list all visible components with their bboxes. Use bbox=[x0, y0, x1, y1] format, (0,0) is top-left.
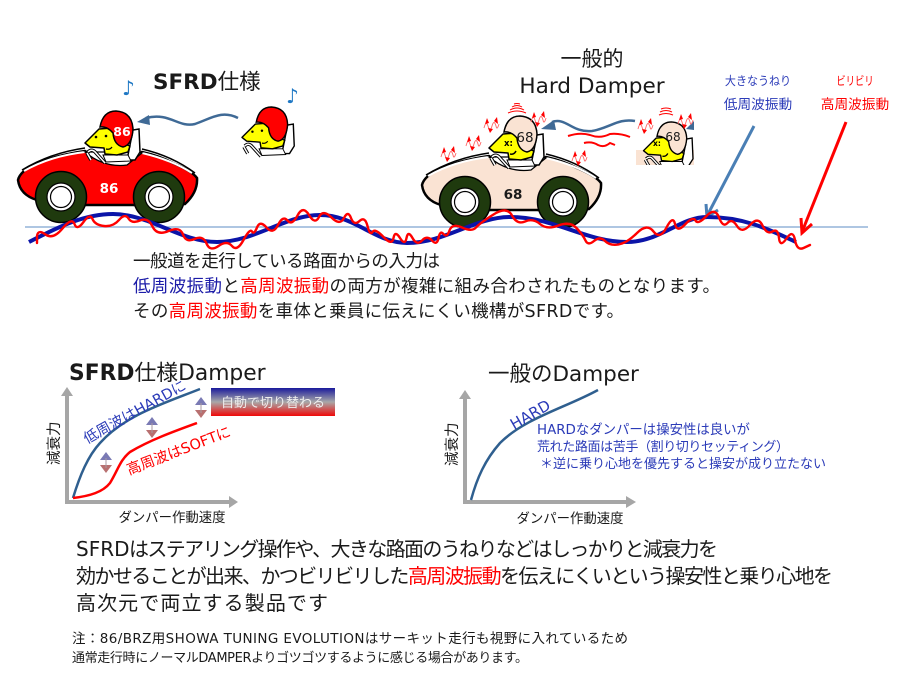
passenger: generic damper shaken driver: 68 bbox=[665, 130, 681, 144]
road baseline bbox=[25, 226, 868, 228]
arrow: to low-frequency wave bbox=[706, 126, 754, 217]
badge: automatic switching: 自動で切り替わる bbox=[221, 396, 325, 411]
text block: road input explanation bbox=[133, 252, 720, 322]
chart title: generic damper: 一般のDamper bbox=[488, 362, 639, 387]
wave chart: low-frequency road undulation bbox=[29, 214, 796, 243]
text block: conclusion: 高次元で両立する製品です bbox=[76, 591, 328, 615]
text block: hard damper note: 荒れた路面は苦手（割り切りセッティング） bbox=[537, 439, 789, 455]
labels: low-frequency: 低周波振動 bbox=[724, 97, 792, 113]
car: red SFRD car with driver: 86 bbox=[113, 124, 131, 139]
axis label: damping force: 減衰力 bbox=[46, 422, 63, 465]
heading: generic hard damper bbox=[519, 47, 665, 99]
curve: hard bbox=[471, 390, 598, 500]
text block: conclusion bbox=[76, 537, 833, 615]
footnote: 通常走行時にノーマルDAMPERよりゴツゴツするように感じる場合があります。 bbox=[72, 650, 528, 666]
text block: hard damper note: ＊逆に乗り心地を優先すると操安が成り立たない bbox=[540, 456, 826, 472]
icon: vibration marks bbox=[441, 104, 693, 166]
wave chart: high-frequency road vibration bbox=[37, 210, 810, 249]
car: generic damper beige car with driver: 68 bbox=[516, 130, 534, 146]
curve: low-frequency hard bbox=[73, 389, 200, 498]
heading: generic hard damper: 一般的 bbox=[560, 47, 624, 71]
car: red SFRD car with driver: 86 bbox=[100, 181, 118, 197]
icon: high-frequency squiggles bbox=[568, 134, 630, 146]
arrow: rough wave to generic car bbox=[541, 120, 635, 131]
car: generic damper beige car with driver bbox=[422, 116, 601, 228]
text block: hard damper note bbox=[537, 422, 826, 472]
labels: low-frequency: 大きなうねり bbox=[725, 74, 791, 88]
footnote: 注：86/BRZ用SHOWA TUNING EVOLUTIONはサーキット走行も視野に入れているため bbox=[72, 631, 628, 647]
car: generic damper beige car with driver: x: bbox=[504, 139, 513, 149]
axis label: damper speed: ダンパー作動速度 bbox=[516, 511, 624, 527]
label: high frequency soft: 高周波はSOFTに bbox=[124, 423, 233, 479]
arrow: calm wave to SFRD car bbox=[137, 115, 238, 125]
axes bbox=[61, 387, 238, 508]
text block: conclusion: はステアリング操作や、大きな路面のうねりなどはしっかりと減衰力を bbox=[129, 537, 718, 561]
labels: high-frequency bbox=[821, 74, 889, 113]
text block: road input explanation: 一般道を走行している路面からの入力は bbox=[133, 252, 440, 272]
icon: music notes: ♪ bbox=[286, 84, 299, 108]
text block: road input explanation: 低周波振動と高周波振動の両方が複雑に組み合わされたものとなります。 bbox=[133, 277, 720, 297]
labels: high-frequency: ビリビリ bbox=[836, 74, 874, 88]
axis label: damper speed: ダンパー作動速度 bbox=[118, 510, 226, 526]
label: low frequency hard: 低周波はHARDに bbox=[81, 377, 189, 447]
curve: high-frequency soft bbox=[73, 423, 197, 498]
text block: road input explanation: その高周波振動を車体と乗員に伝えにくい機構がSFRDです。 bbox=[133, 302, 624, 322]
text block: conclusion: 効かせることが出来、かつビリビリした高周波振動を伝えにくいという操安性と乗り心地を bbox=[76, 564, 833, 588]
chart title: SFRD damper: SFRD仕様Damper bbox=[69, 361, 266, 386]
heading: generic hard damper: Hard Damper bbox=[519, 74, 665, 99]
heading: SFRD spec: SFRD仕様 bbox=[153, 70, 261, 95]
axis label: damping force: 減衰力 bbox=[444, 422, 461, 466]
labels: high-frequency: 高周波振動 bbox=[821, 96, 889, 113]
labels: low-frequency bbox=[724, 74, 792, 113]
badge: automatic switching bbox=[211, 388, 335, 416]
passenger: SFRD comfortable driver bbox=[242, 107, 294, 156]
footnote bbox=[72, 631, 628, 666]
car: generic damper beige car with driver: 68 bbox=[504, 187, 522, 203]
passenger: generic damper shaken driver: x: bbox=[653, 139, 661, 148]
icon: music notes bbox=[122, 76, 299, 108]
text block: conclusion: SFRD bbox=[76, 537, 130, 561]
label: hard: HARD bbox=[507, 396, 554, 433]
chart: generic damper characteristics bbox=[444, 390, 636, 527]
passenger: generic damper shaken driver bbox=[636, 121, 694, 169]
icon: music notes: ♪ bbox=[122, 76, 135, 100]
text block: hard damper note: HARDなダンパーは操安性は良いが bbox=[537, 422, 751, 438]
double arrows: damping change bbox=[100, 397, 207, 473]
axes bbox=[459, 390, 636, 508]
arrow: to high-frequency wave bbox=[801, 122, 846, 233]
chart: SFRD damper characteristics bbox=[46, 377, 238, 526]
car: red SFRD car with driver bbox=[18, 111, 197, 222]
